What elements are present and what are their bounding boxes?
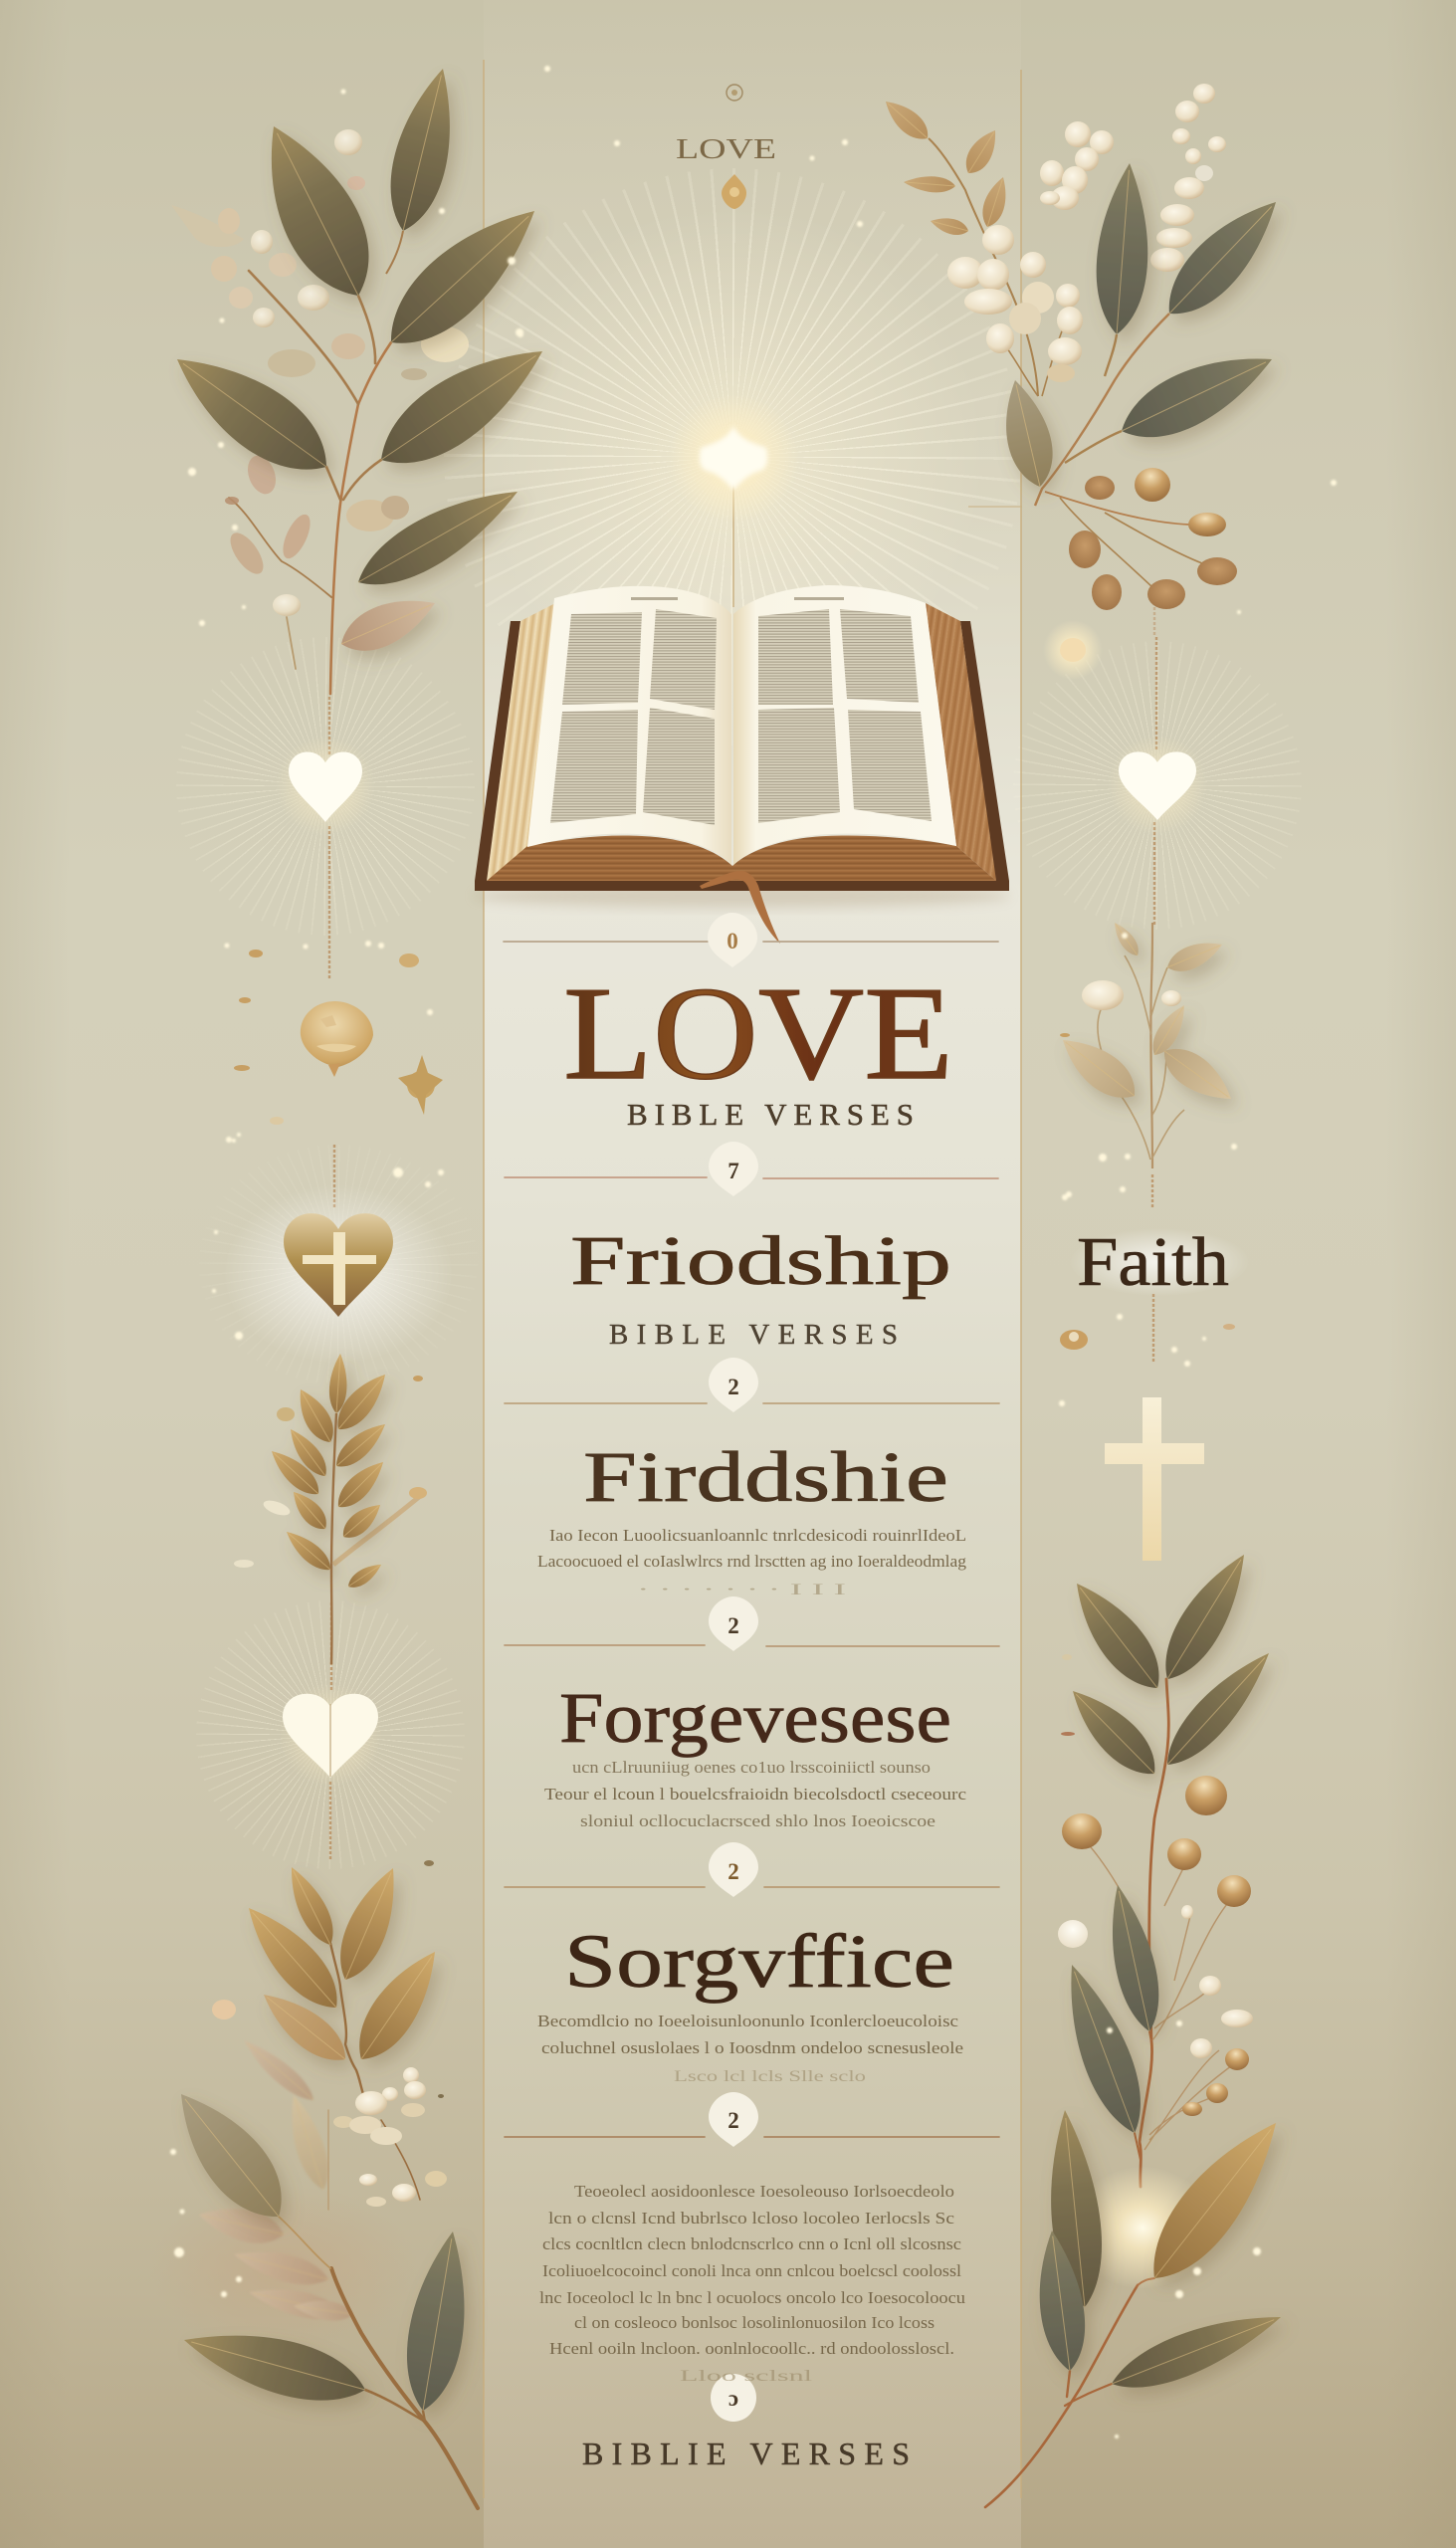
bottom right berries	[1058, 1776, 1253, 2116]
vertical column borders	[484, 60, 1022, 2498]
medallion numerals	[727, 929, 739, 2411]
sprig: mid right pale leaves	[1052, 919, 1241, 1168]
body text block 1: Lacoocuoed el coIaslwlrcs rnd lrsctten ag ino Ioeraldeodmlag	[537, 1552, 967, 1571]
icon: gold heart with cross	[224, 1184, 453, 1364]
icon: left white heart	[276, 737, 375, 836]
bottom right twigs	[1090, 1846, 1239, 2150]
medallion numerals: 2	[728, 1859, 739, 1884]
open Bible	[473, 585, 1010, 944]
branch: bottom left foliage	[149, 1860, 480, 2508]
page headers	[631, 597, 844, 600]
subheading: Bible verses 2: BIBLE VERSES	[609, 1319, 898, 1351]
top right leaves on twig	[879, 94, 1013, 238]
body text block 2	[544, 1758, 967, 1830]
body text block 2: ucn cLlruuniiug oenes co1uo lrsscoiniictl sounso	[572, 1758, 931, 1777]
small title: LOVE: LOVE	[676, 134, 776, 165]
body text block 2: Teour el lcoun l bouelcsfraioidn biecolsdoctl cseceourc	[544, 1785, 967, 1804]
bottom left blossoms	[333, 2067, 447, 2207]
bottom left soft fern	[196, 2033, 354, 2326]
body text block 3: Becomdlcio no Ioeeloisunloonunlo Iconlercloeucoloisc	[537, 2012, 959, 2030]
body text block 4: lnc Ioceolocl lc ln bnc l ocuolocs oncolo lco Ioesocoloocu	[539, 2288, 966, 2307]
right page	[733, 585, 956, 865]
radiating rays: lower left heart	[207, 1616, 454, 1861]
sparkles and gold flecks	[170, 66, 1337, 2439]
bottom right leaves	[1031, 1544, 1298, 2403]
branch: bottom right foliage	[985, 1544, 1298, 2507]
radiating rays: gold heart	[199, 1145, 478, 1383]
book shadow	[473, 884, 1010, 908]
icon: lower left white heart	[279, 1683, 382, 1787]
side dotted stem lines	[329, 597, 1156, 1861]
sprig: mid left gold leaves	[234, 1353, 427, 1664]
top right stems	[929, 138, 1202, 587]
medallion numerals: 7	[728, 1159, 739, 1183]
body text block 3	[537, 2012, 963, 2085]
book covers	[475, 621, 1009, 891]
body text block 4: Icoliuoelcocoincl conoli lnca onn cnlcou boelcscl coolossl	[542, 2261, 961, 2280]
body text block 2: sloniul ocllocuclacrsced shlo lnos Ioeoicscoe	[580, 1811, 936, 1830]
panel: central column background	[484, 0, 1021, 2548]
top left back petals and buds	[171, 129, 469, 616]
branch: top right foliage	[879, 84, 1294, 680]
radiating rays: central star	[445, 168, 1004, 689]
gold flecks	[234, 950, 1235, 2098]
icon: gold shell	[1060, 1330, 1088, 1350]
body text block 1: · · · · · · · I I I	[637, 1582, 846, 1598]
page text columns	[550, 609, 932, 825]
bottom left leaves	[158, 1860, 480, 2416]
medallion numerals: 2	[728, 1375, 739, 1399]
footer: Bible verses: BIBLIE VERSES	[582, 2436, 910, 2471]
medallion numerals: 2	[728, 1613, 739, 1638]
book edge right	[926, 603, 996, 881]
cream blossom clusters	[947, 84, 1226, 382]
book bottom page stack	[487, 835, 996, 881]
radiating rays: left white heart	[196, 657, 456, 912]
radiating rays: right heart	[1032, 660, 1282, 906]
body text block 4: lcn o clcnsl Icnd bubrlsco lcloso locoleo Ierlocsls Sc	[548, 2209, 955, 2228]
bottom left stems	[279, 1943, 478, 2508]
glow behind star	[484, 209, 981, 707]
numbered medallions	[708, 913, 758, 2422]
ribbon bookmark	[700, 871, 780, 944]
heading: LOVE: LOVE	[563, 959, 953, 1107]
medallion numerals: 2	[728, 2108, 739, 2133]
heading: Friendship: Friodship	[570, 1223, 951, 1300]
body text block 4: Lloo sclsnl	[680, 2368, 813, 2385]
top left leaves	[158, 63, 560, 662]
body text block 1: Iao Iecon Luoolicsuanloannlc tnrlcdesicodi rouinrlIdeoL	[549, 1526, 966, 1545]
icon: gold coin	[301, 1001, 373, 1077]
medallion numerals: 0	[727, 929, 738, 954]
gold medallion ornament	[722, 174, 746, 209]
body text block 4: cl on cosleoco bonlsoc losolinlonuosilon Ico lcoss	[574, 2313, 935, 2332]
body text block 4: clcs cocnltlcn clecn bnlodcnscrlco cnn o Icnl oll slcosnsc	[542, 2234, 961, 2253]
heading: Sacrifice: Sorgvffice	[564, 1920, 954, 2004]
bottom left soft fern glow	[149, 2185, 418, 2354]
body text block 4	[539, 2182, 966, 2385]
bottom right stems	[985, 1679, 1168, 2507]
label: Faith: Faith	[1077, 1224, 1229, 1301]
heading: Firddshie: Firddshie	[583, 1437, 948, 1517]
top left stems	[229, 271, 391, 694]
body text block 1	[537, 1526, 967, 1598]
body text block 4: Teoeolecl aosidoonlesce Ioesoleouso Iorlsoecdeolo	[574, 2182, 954, 2201]
central glowing star	[669, 393, 798, 523]
subheading: Bible verses: BIBLE VERSES	[627, 1097, 914, 1132]
medallion numerals: ɔ	[728, 2386, 738, 2411]
book edge left	[487, 603, 555, 881]
top right berries	[1043, 468, 1237, 680]
body text block 4: Hcenl ooiln lncloon. oonlnlocoollc.. rd ondoolossloscl.	[549, 2339, 954, 2358]
icon: right cross	[1105, 1397, 1204, 1561]
small ring ornament at top	[727, 85, 742, 101]
bottom right glow	[1073, 2166, 1212, 2289]
body text block 3: coluchnel osuslolaes l o Ioosdnm ondeloo scnesusleole	[541, 2038, 963, 2057]
icon: right white heart	[1108, 736, 1207, 835]
body text block 3: Lsco lcl lcls Slle sclo	[674, 2068, 866, 2085]
branch: top left foliage	[158, 63, 560, 694]
top right leaves	[994, 161, 1294, 492]
left page	[527, 586, 731, 865]
heading: Forgeness: Forgevesese	[559, 1678, 951, 1758]
section dividers	[504, 942, 999, 2137]
